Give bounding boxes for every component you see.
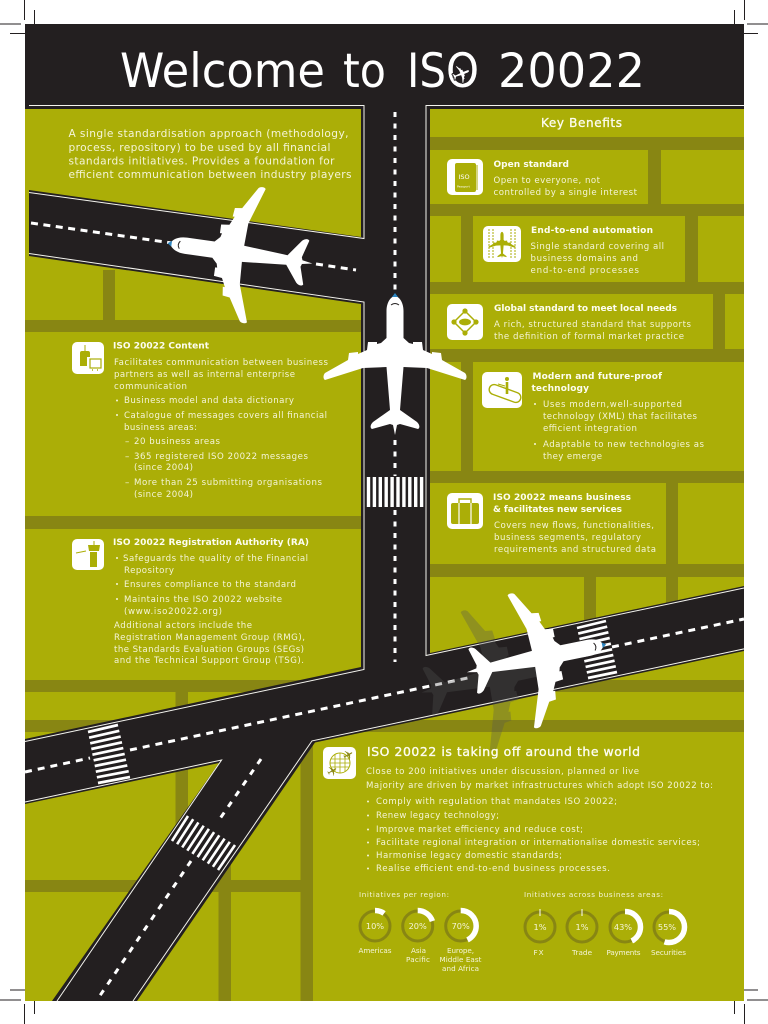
panel: registration authority: Repository: [124, 566, 174, 576]
icon: plane on runway: [483, 226, 521, 262]
panel: registration authority: Maintains the ISO 20022 website: [124, 595, 282, 605]
panel: taking off around the world: Facilitate regional integration or internationalise domestic services;: [376, 838, 700, 848]
panel: open standard: Open to everyone, not: [494, 176, 601, 186]
panel: taking off around the world: [323, 744, 713, 874]
panel: registration authority: (www.iso20022.org): [124, 607, 222, 617]
panel: global standard: [447, 304, 692, 342]
panel: ISO 20022 content: More than 25 submitting organisations: [134, 478, 323, 488]
chart: initiatives per region: 20%: [409, 921, 427, 931]
taxiway grid strips: [25, 137, 744, 1001]
chart: initiatives across business areas: Initiatives across business areas:: [524, 890, 663, 899]
panel: taking off around the world: Majority are driven by market infrastructures which adopt ISO 20022 to:: [366, 781, 713, 791]
panel: modern technology: Uses modern,well-supported: [543, 400, 682, 410]
panel: global standard: A rich, structured standard that supports: [494, 320, 692, 330]
title: Welcome: [120, 44, 325, 99]
plane shadow: [407, 594, 572, 762]
chart: initiatives per region: Middle East: [440, 955, 482, 964]
chart: initiatives across business areas: Securities: [651, 948, 686, 957]
title: to: [343, 44, 386, 99]
panel: end-to-end automation: [483, 226, 664, 276]
panel: ISO 20022 content: Business model and data dictionary: [124, 396, 294, 406]
panel: ISO 20022 content: Catalogue of messages covers all financial: [124, 411, 327, 421]
panel: modern technology: [482, 372, 705, 462]
chart: initiatives per region: 10%: [366, 921, 384, 931]
panel: ISO 20022 content: partners as well as internal enterprise: [114, 370, 295, 380]
chart: initiatives across business areas: 43%: [614, 922, 632, 932]
title: ISO: [407, 44, 479, 99]
panel: modern technology: efficient integration: [543, 424, 637, 434]
panel: taking off around the world: Realise efficient end-to-end business processes.: [376, 864, 610, 874]
panel: modern technology: technology: [532, 384, 589, 394]
chart: initiatives per region: Initiatives per region:: [359, 890, 449, 899]
chart: initiatives across business areas: Trade: [571, 948, 593, 957]
panel: global standard: Global standard to meet local needs: [494, 304, 677, 314]
chart: initiatives across business areas: 1%: [576, 922, 589, 932]
chart: initiatives per region: [358, 890, 482, 973]
panel: registration authority: Additional actors include the: [114, 621, 252, 631]
chart: initiatives across business areas: Payments: [606, 948, 641, 957]
panel: means business: business segments, regulatory: [494, 533, 641, 543]
panel: means business: [447, 493, 656, 555]
panel: means business: Covers new flows, functionalities,: [494, 521, 654, 531]
panel: modern technology: Adaptable to new technologies as: [543, 440, 705, 450]
intro text: efficient communication between industry players: [68, 169, 352, 181]
icon: passport: Passport: [457, 184, 471, 188]
panel: registration authority: and the Technical Support Group (TSG).: [114, 656, 304, 666]
icon: passport: ISO: [458, 173, 470, 181]
intro text: [68, 128, 352, 181]
plane: central vertical runway: [324, 293, 466, 435]
panel: ISO 20022 content: –: [125, 478, 129, 488]
panel: registration authority: ISO 20022 Registration Authority (RA): [113, 538, 309, 548]
panel: end-to-end automation: end-to-end processes: [530, 266, 640, 276]
panel: registration authority: Safeguards the quality of the Financial: [123, 554, 308, 564]
chart: initiatives per region: Americas: [358, 946, 392, 955]
panel: taking off around the world: Improve market efficiency and reduce cost;: [376, 825, 583, 835]
panel: end-to-end automation: Single standard covering all: [530, 242, 664, 252]
intro text: A single standardisation approach (methodology,: [68, 128, 348, 140]
panel: ISO 20022 content: 20 business areas: [134, 437, 221, 447]
panel: open standard: controlled by a single interest: [494, 188, 638, 198]
panel: ISO 20022 content: (since 2004): [134, 490, 193, 500]
panel: ISO 20022 content: communication: [114, 382, 187, 392]
panel: ISO 20022 content: business areas:: [124, 423, 197, 433]
panel: registration authority: Ensures compliance to the standard: [124, 580, 296, 590]
panel: taking off around the world: ISO 20022 is taking off around the world: [367, 744, 640, 759]
panel: registration authority: the Standards Evaluation Groups (SEGs): [114, 645, 304, 655]
intro text: standards initiatives. Provides a foundation for: [68, 156, 335, 168]
panel: means business: requirements and structured data: [494, 545, 656, 555]
chart: initiatives across business areas: [524, 890, 686, 957]
plane: taking off on long runway: [453, 577, 620, 740]
panel: ISO 20022 content: –: [125, 452, 129, 462]
panel: taking off around the world: Comply with regulation that mandates ISO 20022;: [376, 797, 617, 807]
panel: modern technology: Modern and future-proof: [532, 372, 662, 382]
chart: initiatives across business areas: 1%: [534, 922, 547, 932]
icon: passport: [447, 159, 483, 195]
chart: initiatives per region: Asia: [411, 946, 426, 955]
panel: open standard: [447, 159, 638, 198]
panel: registration authority: Registration Management Group (RMG),: [114, 633, 305, 643]
panel: ISO 20022 content: (since 2004): [134, 463, 193, 473]
panel: taking off around the world: Close to 200 initiatives under discussion, planned or live: [366, 767, 639, 777]
icon: control tower: [72, 539, 104, 570]
panel: modern technology: they emerge: [543, 452, 602, 462]
chart: initiatives per region: Europe,: [447, 946, 474, 955]
icon: escalator: [482, 372, 522, 408]
panel: ISO 20022 content: –: [125, 437, 129, 447]
panel: means business: ISO 20022 means business: [493, 493, 631, 503]
chart: initiatives per region: and Africa: [442, 964, 479, 973]
panel: end-to-end automation: business domains and: [530, 254, 638, 264]
chart: initiatives across business areas: 55%: [658, 922, 676, 932]
icon: connected people diamond: [447, 304, 483, 340]
heading: key benefits: Key Benefits: [541, 116, 622, 130]
chart: initiatives per region: 70%: [452, 921, 470, 931]
intro text: process, repository) to be used by all financial: [68, 142, 330, 154]
panel: ISO 20022 content: [72, 342, 329, 500]
panel: means business: & facilitates new services: [493, 505, 622, 515]
icon: globe with planes: [323, 747, 356, 779]
icon: suitcase: [447, 493, 483, 529]
panel: registration authority: [72, 538, 309, 666]
panel: end-to-end automation: End-to-end automation: [531, 226, 653, 236]
chart: initiatives across business areas: FX: [534, 948, 544, 957]
title: 20022: [498, 44, 645, 99]
panel: open standard: Open standard: [494, 160, 569, 170]
panel: ISO 20022 content: Facilitates communication between business: [114, 358, 329, 368]
title: [120, 44, 645, 99]
panel: ISO 20022 content: 365 registered ISO 20022 messages: [134, 452, 309, 462]
panel: modern technology: technology (XML) that facilitates: [543, 412, 698, 422]
panel: global standard: the definition of formal market practice: [494, 332, 684, 342]
panel: ISO 20022 content: ISO 20022 Content: [113, 342, 210, 352]
icon: plane in title letter O: [450, 62, 472, 86]
icon: luggage: [72, 342, 104, 374]
panel: taking off around the world: Renew legacy technology;: [376, 811, 499, 821]
chart: initiatives per region: Pacific: [406, 955, 430, 964]
panel: taking off around the world: Harmonise legacy domestic standards;: [376, 851, 562, 861]
plane: upper left runway: [158, 175, 322, 332]
